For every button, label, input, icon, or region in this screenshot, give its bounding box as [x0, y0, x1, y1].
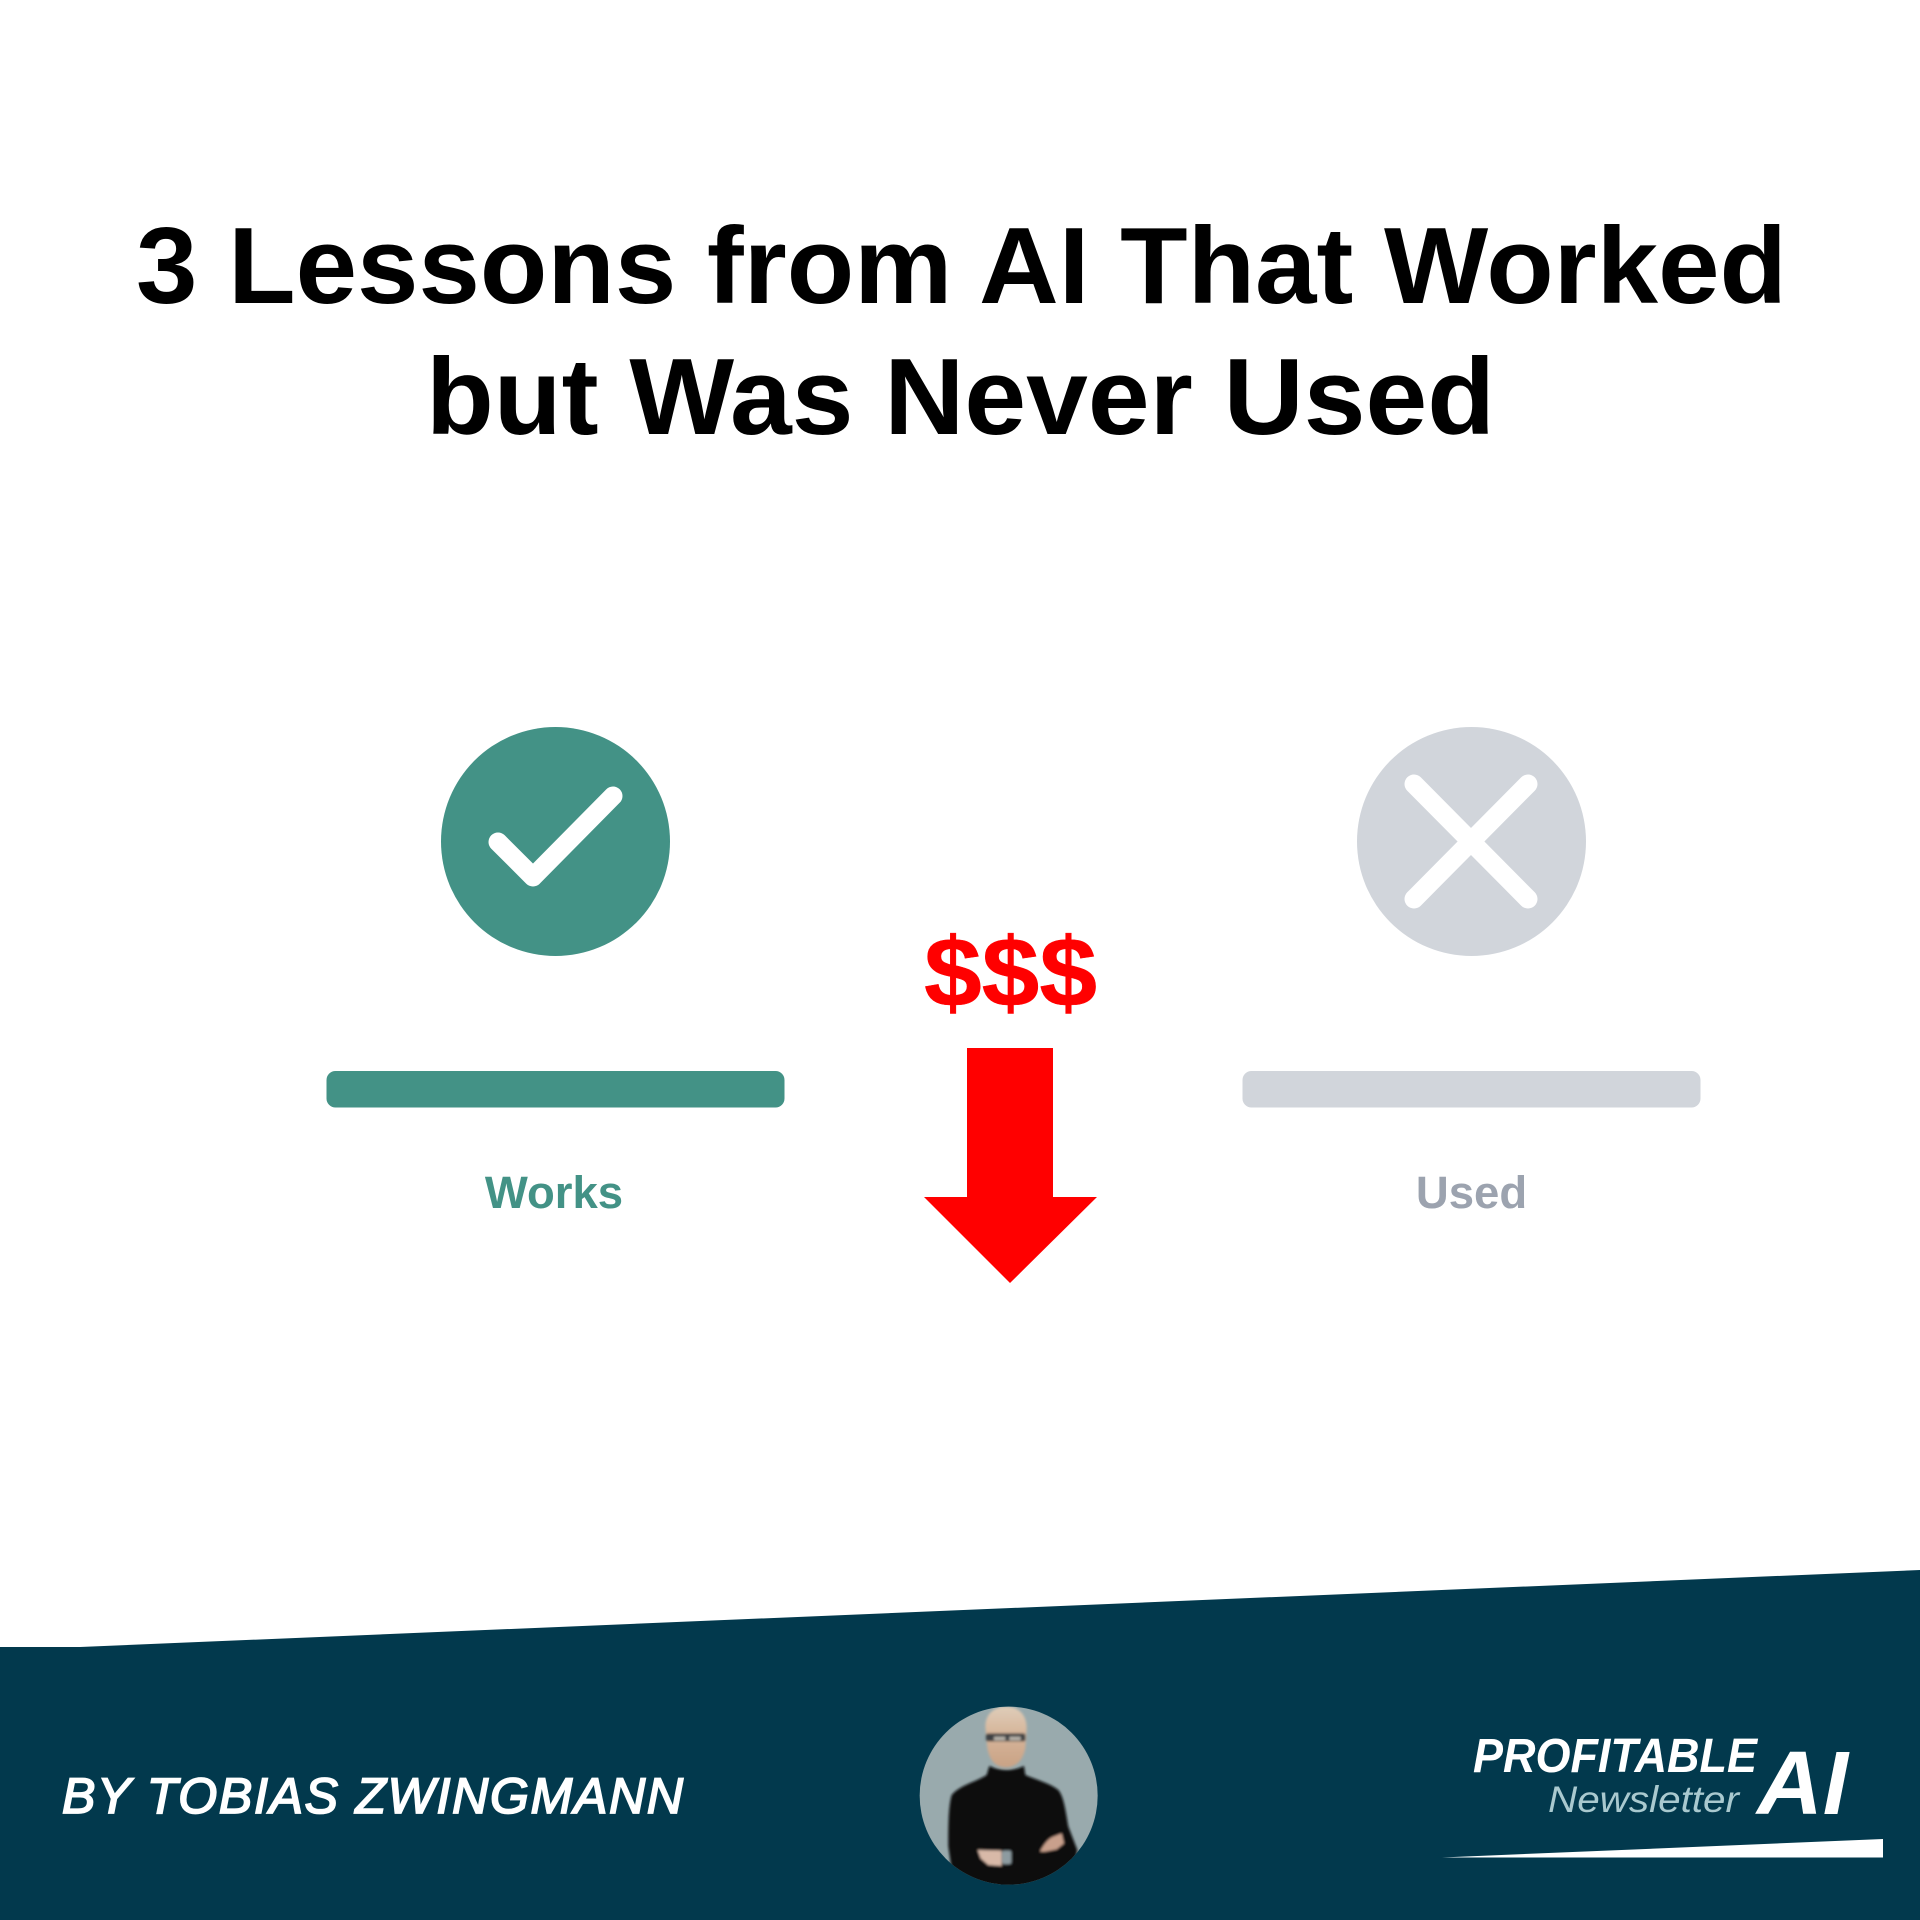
footer band [0, 1570, 1920, 1920]
works bar [326, 1071, 784, 1108]
logo: Profitable AI Newsletter [1442, 1730, 1883, 1858]
logo word: newsletter: Newsletter [1548, 1779, 1741, 1820]
icon: check circle [441, 727, 670, 956]
author portrait [920, 1706, 1098, 1885]
arrow: down [924, 1048, 1097, 1283]
dollar signs: $$$ [924, 917, 1097, 1027]
title: 3 Lessons from AI That Worked [136, 205, 1787, 327]
title: but Was Never Used [426, 336, 1495, 458]
title [136, 205, 1787, 458]
logo underline wedge [1442, 1839, 1883, 1858]
used label: Used [1416, 1167, 1527, 1218]
panel: works [326, 727, 784, 1218]
panel: used [1242, 727, 1700, 1218]
works label: Works [485, 1167, 623, 1218]
icon: cross circle [1357, 727, 1586, 956]
author byline: BY TOBIAS ZWINGMANN [62, 1768, 684, 1824]
logo word: profitable: PROFITABLE [1473, 1730, 1759, 1783]
logo word: AI: AI [1755, 1734, 1850, 1834]
used bar [1242, 1071, 1700, 1108]
